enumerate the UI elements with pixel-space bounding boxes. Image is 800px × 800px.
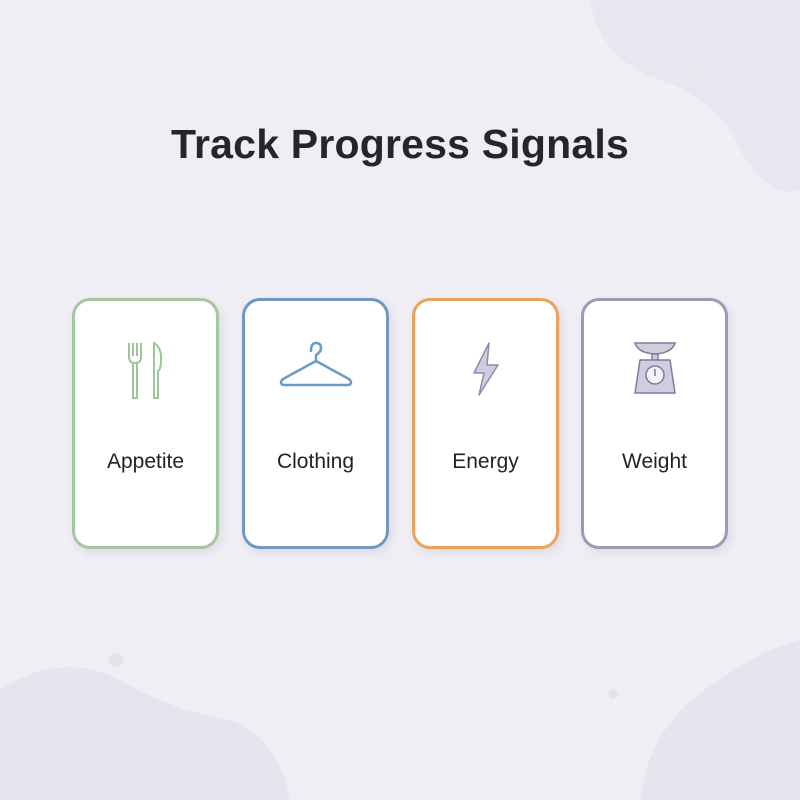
panel: energy	[412, 298, 559, 549]
label: Clothing	[277, 450, 354, 473]
panel: clothing	[242, 298, 389, 549]
icon: fork and knife	[128, 342, 162, 399]
label: Appetite	[107, 450, 184, 473]
icon: scale	[634, 342, 676, 394]
icon: lightning	[473, 342, 499, 396]
title: Track Progress Signals	[171, 121, 629, 167]
label: Energy	[452, 450, 519, 473]
panel: weight	[581, 298, 728, 549]
icon: hanger	[280, 342, 352, 386]
panel: appetite	[72, 298, 219, 549]
label: Weight	[622, 450, 687, 473]
